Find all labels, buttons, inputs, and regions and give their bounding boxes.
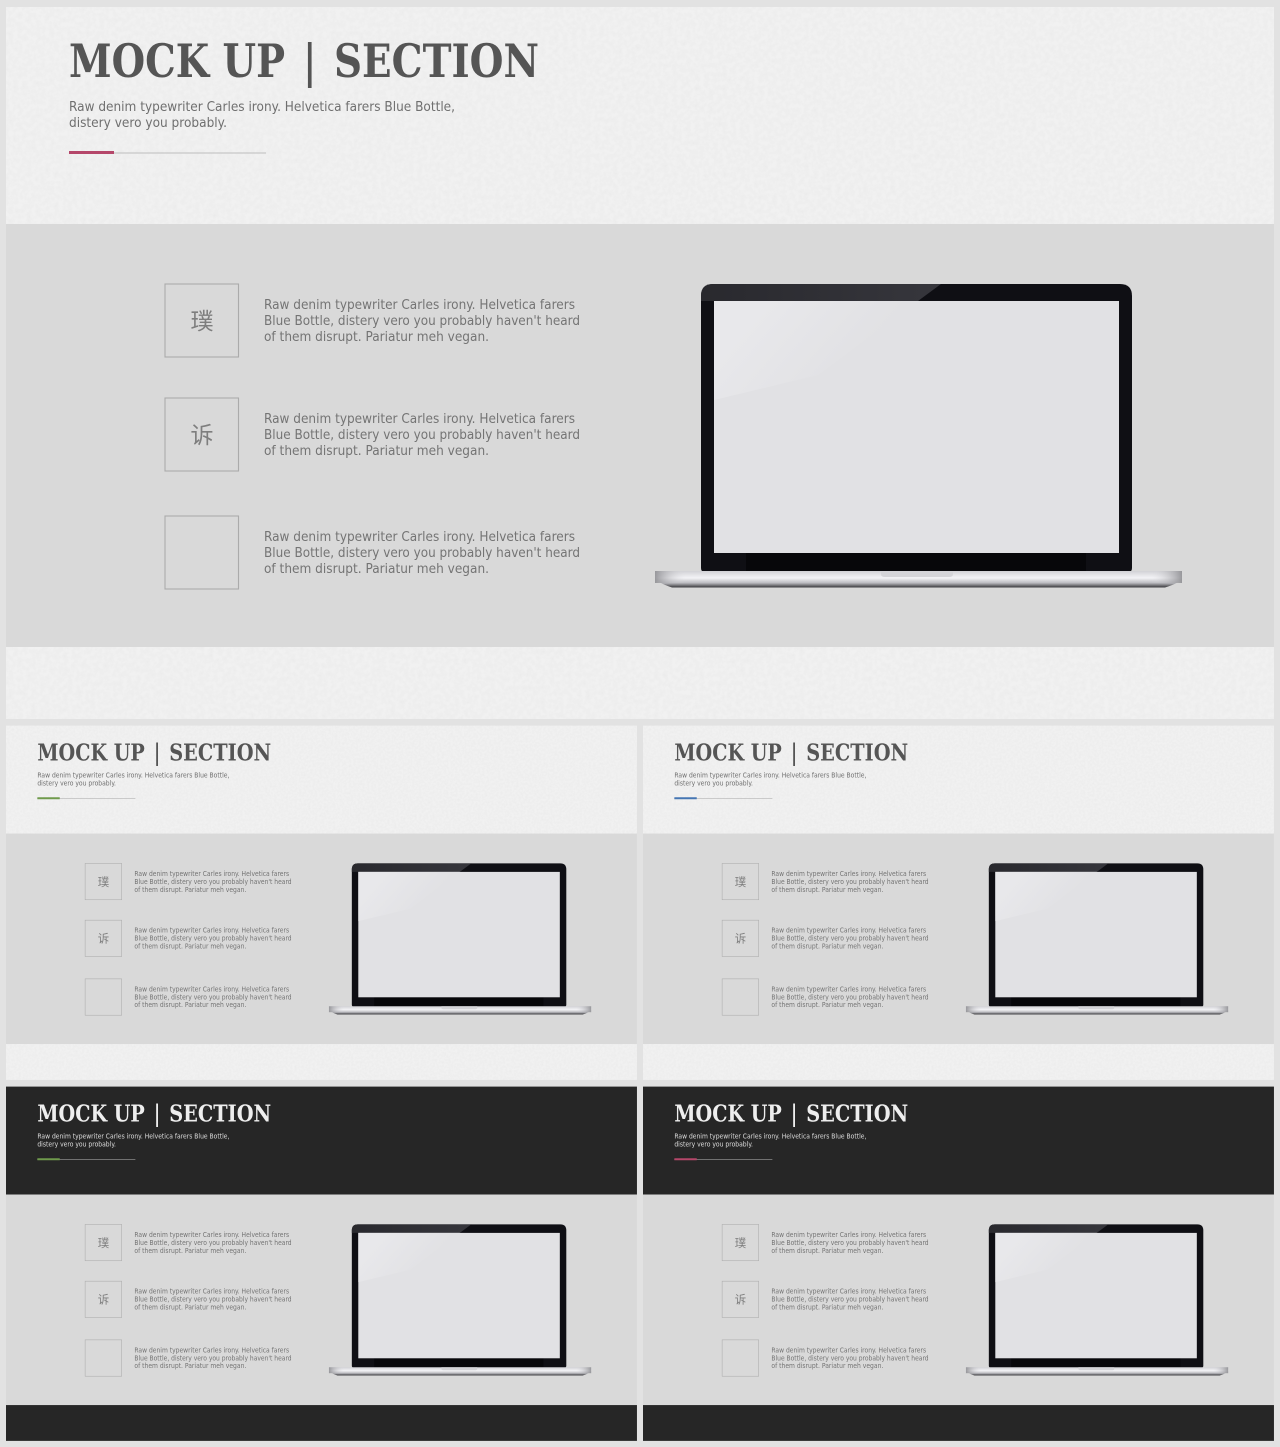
item 1: 璞 <box>735 1236 747 1250</box>
item 2: 诉 <box>98 1294 109 1307</box>
item 3: Blue Bottle, distery vero you probably haven't heard <box>771 1354 929 1362</box>
item 1 <box>85 863 292 900</box>
item 1: of them disrupt. Pariatur meh vegan. <box>264 329 489 345</box>
item 1: Raw denim typewriter Carles irony. Helvetica farers <box>134 870 290 878</box>
header panel <box>643 1087 1274 1195</box>
laptop mockup <box>655 284 1182 588</box>
footer panel <box>6 1044 637 1080</box>
subtitle <box>37 771 229 787</box>
item 3: Raw denim typewriter Carles irony. Helvetica farers <box>771 1346 927 1354</box>
title: SECTION <box>169 1101 271 1127</box>
header panel <box>6 726 637 834</box>
title: | <box>153 740 161 766</box>
item 3: of them disrupt. Pariatur meh vegan. <box>264 561 489 577</box>
subtitle: distery vero you probably. <box>37 779 116 787</box>
item 3 <box>722 1340 929 1376</box>
item 3: Raw denim typewriter Carles irony. Helvetica farers <box>771 985 927 993</box>
subtitle: Raw denim typewriter Carles irony. Helvetica farers Blue Bottle, <box>674 1132 866 1140</box>
item 2: 诉 <box>98 933 109 946</box>
item 3: Raw denim typewriter Carles irony. Helvetica farers <box>134 985 290 993</box>
title: SECTION <box>806 1101 908 1127</box>
title: | <box>790 1101 798 1127</box>
header panel <box>643 726 1274 834</box>
item 2 <box>85 920 292 956</box>
item 2: Raw denim typewriter Carles irony. Helvetica farers <box>134 1288 290 1296</box>
item 1: Raw denim typewriter Carles irony. Helvetica farers <box>771 1231 927 1239</box>
title: SECTION <box>806 740 908 766</box>
item 1 <box>165 284 580 357</box>
title: MOCK UP <box>674 740 782 766</box>
title: MOCK UP <box>37 740 145 766</box>
subtitle <box>674 1132 866 1148</box>
item 3 <box>85 1340 292 1376</box>
content panel <box>6 1195 637 1405</box>
item 1: Raw denim typewriter Carles irony. Helvetica farers <box>264 297 575 313</box>
title: MOCK UP <box>37 1101 145 1127</box>
item 1: of them disrupt. Pariatur meh vegan. <box>771 886 883 894</box>
item 1: Blue Bottle, distery vero you probably haven't heard <box>134 878 292 886</box>
slide: large light section <box>6 7 1274 719</box>
item 2: 诉 <box>190 422 214 448</box>
content panel <box>6 224 1274 647</box>
item 1: Blue Bottle, distery vero you probably haven't heard <box>771 1239 929 1247</box>
item 2: Blue Bottle, distery vero you probably haven't heard <box>134 1296 292 1304</box>
item 3 <box>722 979 929 1015</box>
item 2: of them disrupt. Pariatur meh vegan. <box>264 443 489 459</box>
footer panel <box>6 1405 637 1441</box>
content panel <box>643 1195 1274 1405</box>
footer panel <box>643 1405 1274 1441</box>
item 1: 璞 <box>98 875 110 889</box>
item 1: 璞 <box>98 1236 110 1250</box>
laptop mockup <box>329 1224 591 1375</box>
item 2: of them disrupt. Pariatur meh vegan. <box>134 1304 246 1312</box>
title: SECTION <box>169 740 271 766</box>
subtitle: Raw denim typewriter Carles irony. Helvetica farers Blue Bottle, <box>37 771 229 779</box>
slide: small blue section <box>643 726 1274 1080</box>
subtitle: distery vero you probably. <box>37 1140 116 1148</box>
laptop mockup <box>329 863 591 1014</box>
title: | <box>153 1101 161 1127</box>
item 3: of them disrupt. Pariatur meh vegan. <box>771 1362 883 1370</box>
header panel <box>6 7 1274 224</box>
subtitle: distery vero you probably. <box>674 1140 753 1148</box>
item 2: 诉 <box>735 933 746 946</box>
subtitle <box>69 99 455 131</box>
item 3: Raw denim typewriter Carles irony. Helvetica farers <box>134 1346 290 1354</box>
slide: small dark red section <box>643 1087 1274 1441</box>
item 3: Blue Bottle, distery vero you probably haven't heard <box>771 993 929 1001</box>
item 3: Blue Bottle, distery vero you probably haven't heard <box>134 1354 292 1362</box>
item 3: of them disrupt. Pariatur meh vegan. <box>771 1001 883 1009</box>
item 1 <box>722 1224 929 1261</box>
item 2: Raw denim typewriter Carles irony. Helvetica farers <box>771 1288 927 1296</box>
item 1: 璞 <box>735 875 747 889</box>
laptop mockup <box>966 863 1228 1014</box>
header panel <box>6 1087 637 1195</box>
item 1 <box>722 863 929 900</box>
content panel <box>6 834 637 1044</box>
item 3: Raw denim typewriter Carles irony. Helvetica farers <box>264 529 575 545</box>
item 2: Blue Bottle, distery vero you probably haven't heard <box>134 935 292 943</box>
item 1 <box>85 1224 292 1261</box>
item 3: Blue Bottle, distery vero you probably haven't heard <box>134 993 292 1001</box>
item 2 <box>165 398 580 471</box>
item 1: of them disrupt. Pariatur meh vegan. <box>771 1247 883 1255</box>
item 1: Raw denim typewriter Carles irony. Helvetica farers <box>134 1231 290 1239</box>
accent underline <box>674 797 772 799</box>
item 1: Raw denim typewriter Carles irony. Helvetica farers <box>771 870 927 878</box>
title: SECTION <box>334 34 539 88</box>
accent underline <box>37 1158 135 1160</box>
footer panel <box>643 1044 1274 1080</box>
item 2: of them disrupt. Pariatur meh vegan. <box>771 1304 883 1312</box>
item 2: of them disrupt. Pariatur meh vegan. <box>134 943 246 951</box>
content panel <box>643 834 1274 1044</box>
item 2 <box>722 920 929 956</box>
item 2: 诉 <box>735 1294 746 1307</box>
item 3: of them disrupt. Pariatur meh vegan. <box>134 1001 246 1009</box>
item 2: Raw denim typewriter Carles irony. Helvetica farers <box>771 927 927 935</box>
item 2: Blue Bottle, distery vero you probably haven't heard <box>771 1296 929 1304</box>
subtitle <box>674 771 866 787</box>
subtitle: Raw denim typewriter Carles irony. Helvetica farers Blue Bottle, <box>37 1132 229 1140</box>
item 1: 璞 <box>190 308 214 334</box>
item 2: Raw denim typewriter Carles irony. Helvetica farers <box>264 411 575 427</box>
item 3: Blue Bottle, distery vero you probably haven't heard <box>264 545 580 561</box>
title: | <box>302 34 318 88</box>
item 2 <box>85 1281 292 1317</box>
item 2: Blue Bottle, distery vero you probably haven't heard <box>264 427 580 443</box>
accent underline <box>69 151 266 154</box>
subtitle: Raw denim typewriter Carles irony. Helvetica farers Blue Bottle, <box>674 771 866 779</box>
item 3: of them disrupt. Pariatur meh vegan. <box>134 1362 246 1370</box>
accent underline <box>674 1158 772 1160</box>
item 2: Blue Bottle, distery vero you probably haven't heard <box>771 935 929 943</box>
item 1: Blue Bottle, distery vero you probably haven't heard <box>134 1239 292 1247</box>
item 1: of them disrupt. Pariatur meh vegan. <box>134 886 246 894</box>
laptop mockup <box>966 1224 1228 1375</box>
title: MOCK UP <box>674 1101 782 1127</box>
item 3 <box>85 979 292 1015</box>
subtitle: Raw denim typewriter Carles irony. Helvetica farers Blue Bottle, <box>69 99 455 115</box>
accent underline <box>37 797 135 799</box>
slide: small dark green section <box>6 1087 637 1441</box>
item 3 <box>165 516 580 589</box>
item 2: Raw denim typewriter Carles irony. Helvetica farers <box>134 927 290 935</box>
item 2 <box>722 1281 929 1317</box>
item 1: of them disrupt. Pariatur meh vegan. <box>134 1247 246 1255</box>
subtitle: distery vero you probably. <box>674 779 753 787</box>
subtitle <box>37 1132 229 1148</box>
item 2: of them disrupt. Pariatur meh vegan. <box>771 943 883 951</box>
title: MOCK UP <box>69 34 285 88</box>
footer panel <box>6 647 1274 719</box>
slide: small green section <box>6 726 637 1080</box>
item 1: Blue Bottle, distery vero you probably haven't heard <box>771 878 929 886</box>
title: | <box>790 740 798 766</box>
item 1: Blue Bottle, distery vero you probably haven't heard <box>264 313 580 329</box>
subtitle: distery vero you probably. <box>69 115 227 131</box>
